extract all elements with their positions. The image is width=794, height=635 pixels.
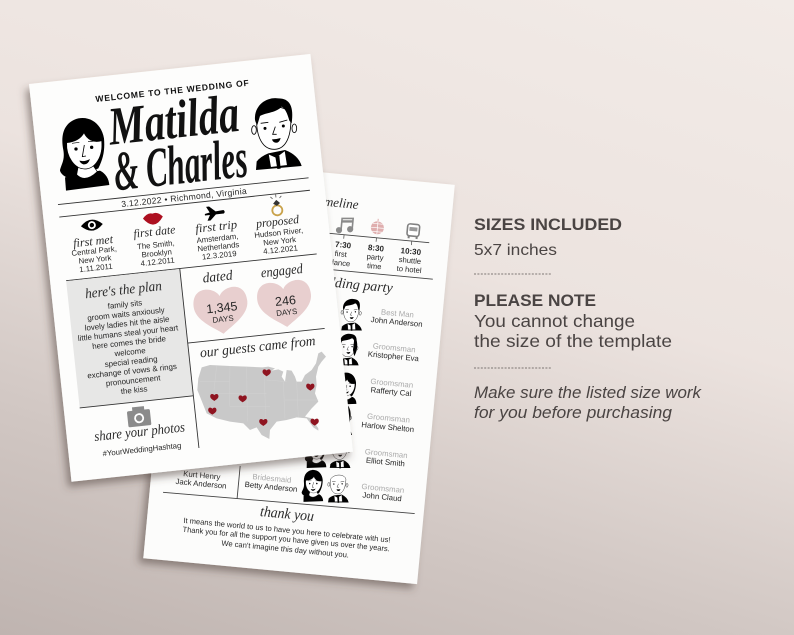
- party member: best man: [370, 307, 424, 329]
- party member: Elliot Smith: [364, 447, 408, 469]
- text block: sizes included: SIZES INCLUDED: [474, 216, 622, 234]
- text block: purchase reminder: for you before purchasing: [474, 403, 673, 422]
- stat: dated: DAYS: [212, 314, 234, 325]
- title: and Charles: & Charles: [111, 127, 250, 203]
- icon: eye: [80, 218, 103, 232]
- panel: here's the plan: [66, 269, 193, 408]
- party member: ushers: Kurt Henry: [183, 469, 221, 482]
- timeline entry 7:30: first: [334, 249, 348, 259]
- text block: ceremony order: groom waits anxiously: [87, 305, 165, 323]
- column: first trip: 12.3.2019: [202, 249, 237, 262]
- text block: thank you message: Thank you for all the support you have given us over the years.: [182, 525, 390, 553]
- timeline entry 8:30: party: [366, 252, 384, 262]
- text block: please note: the size of the template: [474, 331, 672, 351]
- party member: Elliot Smith: Elliot Smith: [366, 456, 405, 468]
- text block: thank you message: It means the world to us to have you here to celebrate with us!: [183, 516, 391, 544]
- timeline entry 7:30: 7:30: [335, 240, 352, 250]
- icon: ring: [270, 194, 283, 216]
- portrait: best man: [339, 298, 365, 332]
- stat: engaged: [254, 261, 314, 330]
- column: first date: Brooklyn: [141, 247, 172, 259]
- portrait: Charles: [252, 98, 302, 170]
- icon: plane: [204, 205, 225, 221]
- party member: John Claud: John Claud: [362, 491, 402, 503]
- portrait: Matilda: [60, 118, 109, 191]
- text block: sizes included: [474, 216, 622, 259]
- party member: best man: John Anderson: [370, 315, 423, 329]
- column: first date: first date: [133, 222, 177, 241]
- text block: please note: [474, 292, 672, 351]
- icon: lips: [142, 212, 164, 226]
- text block: thank you message: [181, 516, 391, 563]
- panel: back card: [143, 159, 455, 584]
- timeline entry 7:30: dance: [329, 257, 351, 268]
- text block: purchase reminder: [474, 383, 702, 422]
- column: first date: [133, 222, 180, 269]
- portrait: groomsman four: [329, 404, 355, 437]
- party member: John Claud: Groomsman: [361, 482, 405, 495]
- hashtag: #YourWeddingHashtag: [102, 441, 182, 458]
- column: proposed: 4.12.2021: [263, 243, 298, 256]
- stat: engaged: 246: [274, 293, 297, 309]
- timeline entry 10:30: 10:30: [400, 246, 422, 257]
- party member: ushers: [175, 468, 228, 491]
- column: proposed: New York: [263, 235, 297, 247]
- column: proposed: [252, 212, 305, 257]
- text block: ceremony order: pronouncement: [105, 373, 162, 388]
- stat: dated: 1,345: [206, 299, 238, 316]
- column: first trip: [195, 217, 241, 262]
- panel: front card: [29, 54, 353, 482]
- portrait: groomsman six, bald: [326, 474, 351, 504]
- portrait: bridesmaid six: [301, 469, 326, 504]
- party member: Kristopher Eva: [367, 341, 421, 363]
- column: proposed: Hudson River,: [254, 226, 304, 240]
- portrait: groomsman five: [328, 435, 353, 470]
- column: first trip: Netherlands: [197, 240, 240, 254]
- icon: music note: [336, 217, 354, 234]
- party member: Kristopher Eva: Groomsman: [372, 341, 416, 354]
- timeline entry 8:30: time: [367, 261, 382, 271]
- stat: engaged: DAYS: [276, 307, 298, 318]
- text block: ceremony order: exchange of vows & rings: [87, 362, 177, 380]
- heading: our guests came from: our guests came from: [199, 334, 316, 361]
- title: Matilda: Matilda: [105, 83, 242, 157]
- text block: ceremony order: [74, 295, 186, 400]
- portrait: groomsman three: [334, 372, 359, 406]
- heading: here's the plan: here's the plan: [84, 279, 163, 302]
- timeline entry 8:30: [365, 243, 385, 271]
- party member: Elliot Smith: Groomsman: [364, 447, 408, 460]
- timeline entry 10:30: shuttle: [398, 255, 422, 266]
- stat: engaged: engaged: [260, 262, 304, 281]
- column: proposed: proposed: [254, 212, 301, 231]
- heading: thank you: thank you: [259, 504, 315, 525]
- icon: camera: [126, 406, 151, 427]
- column: first met: 1.11.2011: [79, 262, 113, 274]
- text block: thank you message: We can't imagine this day without you.: [221, 539, 349, 560]
- text block: ceremony order: the kiss: [120, 384, 148, 396]
- text block: ceremony order: family sits: [107, 298, 143, 311]
- column: first date: The Smith,: [137, 238, 175, 251]
- icon: disco ball: [370, 218, 385, 235]
- party member: Rafferty Cal: Rafferty Cal: [370, 385, 412, 398]
- column: first date: 4.12.2011: [140, 256, 175, 268]
- party member: Betty Anderson: Bridesmaid: [252, 472, 292, 485]
- location markers: [208, 369, 319, 426]
- party member: Rafferty Cal: Groomsman: [370, 377, 414, 390]
- column: first met: New York: [78, 253, 112, 266]
- timeline entry 10:30: to hotel: [396, 264, 422, 275]
- text block: ceremony order: here comes the bride: [92, 334, 167, 351]
- title: welcome line: WELCOME TO THE WEDDING OF: [95, 78, 249, 104]
- column: first trip: Amsterdam,: [196, 232, 239, 245]
- stat: dated: dated: [202, 268, 234, 287]
- portrait: bridesmaid five: [304, 435, 329, 470]
- timeline entry 8:30: 8:30: [368, 243, 385, 254]
- column: first met: Central Park,: [71, 244, 117, 258]
- party member: Rafferty Cal: [369, 377, 414, 398]
- text block: purchase reminder: Make sure the listed size work: [474, 383, 702, 402]
- text block: please note: You cannot change: [474, 311, 635, 331]
- timeline entry 10:30: [396, 246, 424, 275]
- text block: ceremony order: lovely ladies hit the aisle: [84, 315, 170, 333]
- party member: Harlow Shelton: Harlow Shelton: [361, 420, 414, 434]
- heading: share your photos: share your photos: [94, 420, 186, 445]
- column: first met: [70, 232, 119, 275]
- timeline entry 7:30: [329, 240, 352, 268]
- party member: Harlow Shelton: [361, 411, 415, 434]
- party member: Kristopher Eva: Kristopher Eva: [367, 349, 420, 363]
- party member: Betty Anderson: [244, 471, 299, 494]
- column: first met: first met: [72, 232, 114, 250]
- party member: Betty Anderson: Betty Anderson: [244, 480, 298, 494]
- text block: ceremony order: welcome: [113, 346, 147, 358]
- stat: dated: [190, 267, 250, 337]
- party member: ushers: Jack Anderson: [175, 477, 227, 491]
- party member: Harlow Shelton: Groomsman: [367, 412, 410, 425]
- column: first trip: first trip: [195, 217, 238, 236]
- icon: shuttle bus: [407, 224, 420, 239]
- map: guest locations: [197, 352, 326, 439]
- text block: ceremony order: special reading: [104, 354, 158, 369]
- text block: please note: PLEASE NOTE: [474, 292, 596, 310]
- party member: John Claud: [360, 482, 405, 503]
- text block: ceremony order: little humans steal your heart: [77, 323, 179, 343]
- heading: wedding party: meet the wedding party: [262, 269, 394, 297]
- USA silhouette: [197, 352, 326, 439]
- date and location: 3.12.2022 • Richmond, Virginia: [121, 186, 247, 209]
- heading: timeline: reception timeline: [264, 188, 359, 212]
- portrait: groomsman two: [336, 333, 361, 367]
- text block: sizes included: 5x7 inches: [474, 242, 557, 259]
- party member: best man: Best Man: [381, 308, 414, 320]
